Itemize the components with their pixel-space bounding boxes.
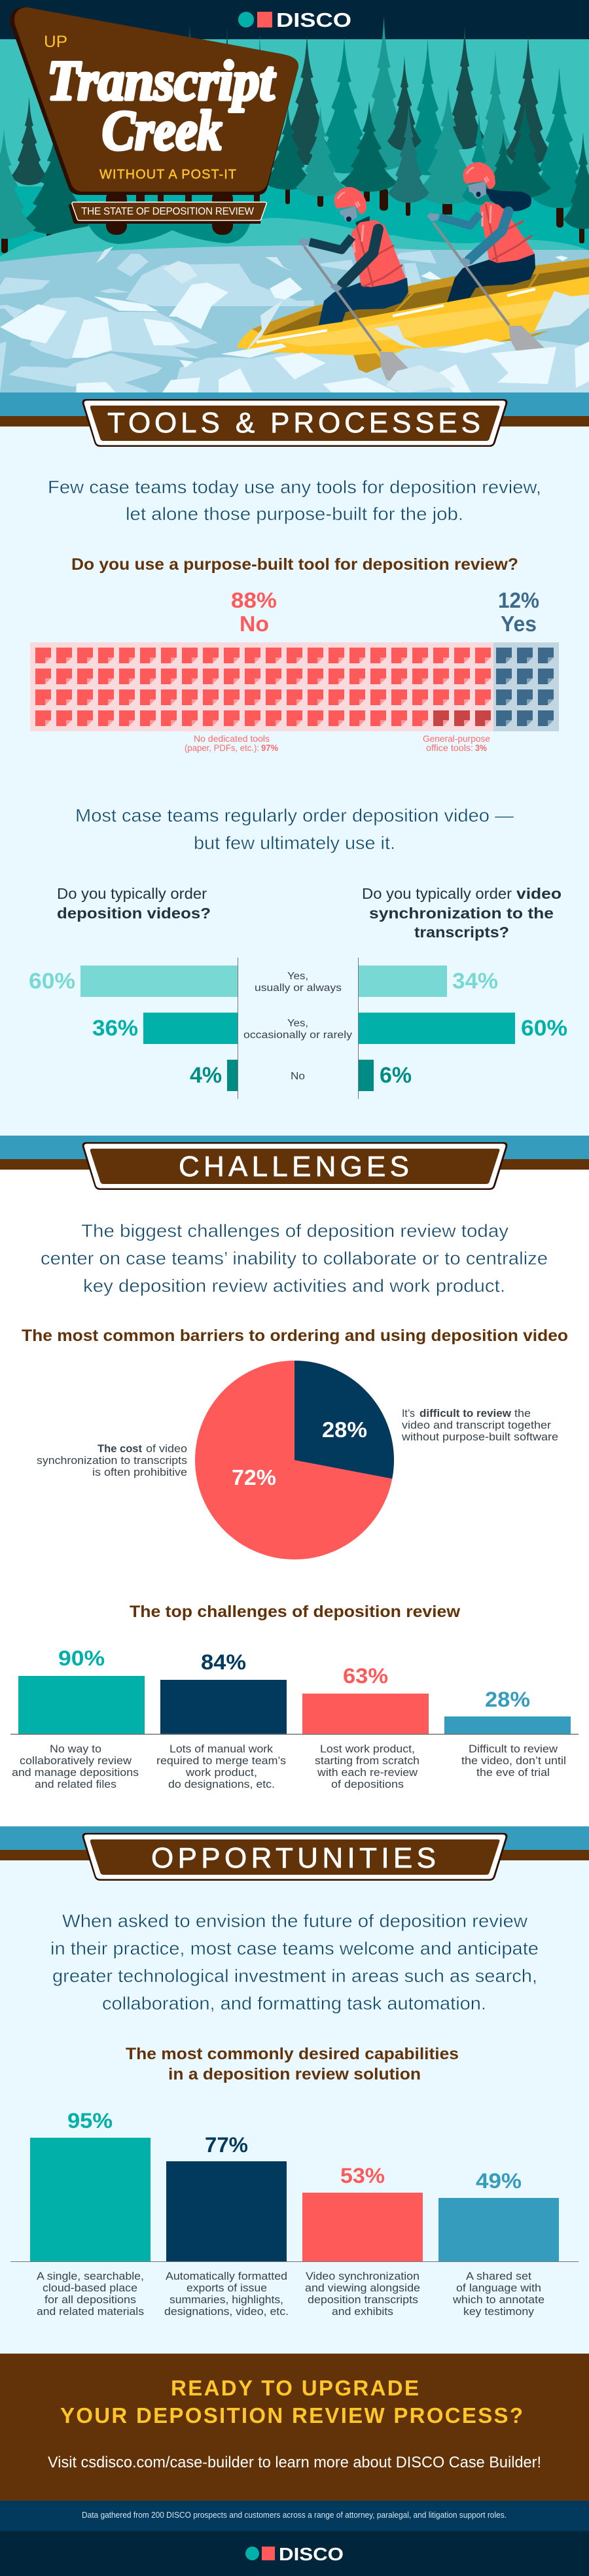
heading: barriers: The most common barriers to ordering and using deposition video — [22, 1327, 568, 1345]
caption: no dedicated tools: (paper, PDFs, etc.): — [185, 742, 259, 753]
right percentages: 34% — [452, 969, 498, 994]
title sign: Transcript — [47, 49, 276, 112]
section band: opportunities — [0, 1826, 589, 1860]
intro text: tools: let alone those purpose-built for the job. — [126, 504, 463, 524]
caption: video synchronization: and exhibits — [332, 2305, 393, 2318]
source note: Data gathered from 200 DISCO prospects and customers across a range of attorney, paralegal, and litigation support roles. — [82, 2511, 507, 2520]
left percentages: 4% — [190, 1063, 222, 1088]
intro text: video: Most case teams regularly order deposition video — — [75, 805, 514, 826]
title sign: WITHOUT A POST-IT — [99, 167, 236, 182]
row labels: occasionally or rarely — [243, 1030, 352, 1041]
logo: DISCO top: DISCO — [276, 9, 351, 31]
hero illustration — [0, 0, 589, 392]
caption: no way to collaborate — [12, 1743, 139, 1790]
row labels — [243, 971, 352, 1082]
caption: cost of video: The cost — [98, 1442, 142, 1455]
stat: 88% no — [231, 588, 277, 636]
left percentages: 60% — [29, 969, 75, 994]
front paddler — [298, 187, 408, 381]
footer with logo — [0, 2531, 589, 2576]
question: video synchronization: Do you typically order — [362, 885, 512, 902]
right bars — [359, 966, 515, 1091]
caption: no way to collaborate: and related files — [35, 1778, 116, 1790]
cta heading: READY TO UPGRADE — [171, 2376, 419, 2400]
bar chart: top challenges: 84% — [201, 1650, 246, 1674]
section heading: opportunities — [82, 1833, 507, 1881]
caption: formatted exports: summaries, highlights, — [170, 2293, 283, 2306]
pie chart: barriers: 28% — [322, 1418, 367, 1442]
caption: manual work: required to merge team’s — [156, 1754, 286, 1767]
left bars — [80, 966, 238, 1091]
caption: no way to collaborate: No way to — [50, 1743, 101, 1755]
bar chart: desired capabilities: 77% — [205, 2133, 248, 2157]
top navy band — [0, 0, 589, 39]
caption: difficult to review video: the eve of trial — [476, 1766, 550, 1779]
caption: manual work: do designations, etc. — [168, 1778, 275, 1790]
pie chart: barriers — [195, 1361, 394, 1559]
caption: video synchronization — [305, 2270, 420, 2318]
row labels: No — [291, 1071, 305, 1082]
caption: no way to collaborate: collaboratively review — [20, 1754, 132, 1767]
stat: 12% yes — [498, 588, 539, 636]
title sign: UP — [44, 33, 67, 51]
caption: cost of video: of video — [146, 1442, 187, 1455]
pie chart: barriers: 72% — [232, 1465, 276, 1489]
caption: general-purpose office tools — [423, 733, 490, 753]
heading: desired capabilities — [126, 2045, 459, 2083]
question: deposition videos: deposition videos? — [57, 905, 211, 922]
caption: video synchronization: Video synchronization — [306, 2270, 419, 2282]
source note — [0, 2501, 589, 2531]
caption: difficult to review — [401, 1407, 558, 1443]
caption: lost work product: with each re-review — [317, 1766, 418, 1779]
row labels: Yes, — [287, 971, 308, 982]
caption: difficult to review: the — [514, 1407, 531, 1419]
river bank waves — [0, 218, 589, 268]
bar chart: top challenges — [10, 1646, 579, 1790]
caption: formatted exports: designations, video, etc. — [164, 2305, 289, 2318]
river of paper — [0, 245, 589, 392]
bar chart: desired capabilities: 95% — [67, 2109, 113, 2132]
forest of trees — [0, 16, 589, 253]
intro text: tools — [48, 477, 541, 524]
section heading: opportunities: OPPORTUNITIES — [151, 1842, 436, 1874]
caption: shared language: A shared set — [466, 2270, 531, 2282]
bar chart: desired capabilities: 53% — [340, 2164, 385, 2187]
call to action panel — [0, 2354, 589, 2501]
caption: lost work product: of depositions — [331, 1778, 404, 1790]
cta link text: Visit csdisco.com/case-builder to learn more about DISCO Case Builder! — [48, 2454, 541, 2471]
caption: cost of video — [37, 1442, 187, 1478]
intro text: challenges: center on case teams’ inability to collaborate or to centralize — [41, 1248, 548, 1268]
section heading: tools and processes: TOOLS & PROCESSES — [107, 407, 480, 439]
sign posts — [106, 190, 260, 235]
heading: desired capabilities: The most commonly desired capabilities — [126, 2045, 459, 2063]
section band: challenges — [0, 1136, 589, 1826]
section heading: tools and processes — [82, 399, 507, 447]
caption: no dedicated tools: No dedicated tools — [194, 733, 270, 744]
caption: cost of video: is often prohibitive — [92, 1466, 187, 1478]
caption: shared language: of language with — [456, 2282, 541, 2294]
caption: difficult to review: difficult to review — [419, 1407, 512, 1419]
pictogram chart: sticky notes — [30, 642, 559, 731]
caption: lost work product: starting from scratch — [315, 1754, 419, 1767]
heading: purpose-built tool question: Do you use a purpose-built tool for deposition review? — [71, 555, 518, 574]
intro text: video — [75, 805, 514, 853]
caption: shared language: key testimony — [463, 2305, 535, 2318]
caption: difficult to review: It’s — [402, 1407, 415, 1419]
caption: difficult to review: without purpose-built software — [401, 1431, 558, 1443]
right percentages: 60% — [521, 1016, 567, 1041]
heading: desired capabilities: in a deposition review solution — [168, 2065, 421, 2083]
intro text: tools: Few case teams today use any tools for deposition review, — [48, 477, 541, 497]
caption: no way to collaborate: and manage depositions — [12, 1766, 139, 1779]
caption: general-purpose office tools: office tools: — [426, 742, 473, 753]
caption: formatted exports: exports of issue — [187, 2282, 267, 2294]
subtitle banner — [69, 202, 266, 224]
question: video synchronization — [362, 885, 562, 941]
caption: single place: and related materials — [37, 2305, 144, 2318]
stat: 12% yes: 12% — [498, 588, 539, 612]
heading: top challenges: The top challenges of deposition review — [130, 1603, 461, 1621]
bar chart: top challenges: 90% — [58, 1646, 105, 1670]
intro text: video: but few ultimately use it. — [194, 833, 395, 853]
section heading: challenges: CHALLENGES — [179, 1151, 409, 1183]
caption: single place: cloud-based place — [43, 2282, 137, 2294]
diverging bar chart: video ordering — [29, 958, 567, 1099]
raft — [237, 258, 589, 373]
subtitle banner: THE STATE OF DEPOSITION REVIEW — [81, 206, 255, 217]
caption: formatted exports — [164, 2270, 289, 2318]
caption: single place: A single, searchable, — [37, 2270, 144, 2282]
caption: single place: for all depositions — [45, 2293, 136, 2306]
bar chart: desired capabilities — [10, 2109, 579, 2318]
caption: manual work — [156, 1743, 286, 1790]
cta heading — [60, 2376, 523, 2428]
intro text: challenges — [41, 1221, 548, 1296]
section band: tools — [0, 392, 589, 426]
bar chart: top challenges: 63% — [343, 1664, 388, 1688]
question: deposition videos: Do you typically order — [57, 885, 207, 902]
intro text: opportunities: When asked to envision the future of deposition review — [62, 1911, 528, 1931]
intro text: opportunities: greater technological investment in areas such as search, — [52, 1966, 537, 1986]
caption: shared language — [452, 2270, 544, 2318]
caption: single place — [37, 2270, 144, 2318]
caption: difficult to review video: Difficult to review — [469, 1743, 558, 1755]
caption: difficult to review video — [461, 1743, 566, 1779]
stat: 88% no: 88% — [231, 588, 277, 612]
rear paddler — [427, 162, 546, 368]
caption: difficult to review: video and transcript together — [402, 1419, 551, 1431]
question: video synchronization: video — [516, 885, 562, 902]
caption: video synchronization: deposition transcripts — [308, 2293, 418, 2306]
foreground papers — [77, 291, 589, 392]
cta heading: YOUR DEPOSITION REVIEW PROCESS? — [60, 2403, 523, 2428]
caption: video synchronization: and viewing alongside — [305, 2282, 420, 2294]
question: video synchronization: transcripts? — [414, 924, 509, 941]
bar chart: desired capabilities: 49% — [476, 2169, 522, 2193]
logo: DISCO top — [238, 9, 351, 31]
caption: no dedicated tools — [185, 733, 279, 753]
section heading: challenges — [82, 1142, 507, 1190]
stat: 88% no: No — [240, 612, 269, 636]
bar chart: top challenges: 28% — [485, 1688, 530, 1711]
caption: manual work: work product, — [185, 1766, 257, 1779]
intro text: opportunities: in their practice, most case teams welcome and anticipate — [50, 1938, 539, 1958]
question: video synchronization: synchronization to the — [369, 905, 554, 922]
intro text: opportunities: collaboration, and formatting task automation. — [102, 1993, 486, 2013]
caption: formatted exports: Automatically formatted — [166, 2270, 287, 2282]
caption: difficult to review video: the video, don’t until — [461, 1754, 566, 1767]
caption: manual work: Lots of manual work — [170, 1743, 274, 1755]
intro text: challenges: The biggest challenges of deposition review today — [81, 1221, 509, 1241]
caption: lost work product: Lost work product, — [320, 1743, 415, 1755]
caption: lost work product — [315, 1743, 419, 1790]
question: deposition videos — [57, 885, 211, 922]
row labels: Yes, — [287, 1018, 308, 1029]
right percentages — [380, 969, 567, 1088]
title sign: Creek — [102, 99, 222, 162]
row labels: usually or always — [255, 983, 342, 994]
stat: 12% yes: Yes — [501, 612, 537, 636]
footer with logo: DISCO — [279, 2544, 344, 2564]
intro text: opportunities — [50, 1911, 539, 2013]
caption: general-purpose office tools: General-purpose — [423, 733, 490, 744]
caption: shared language: which to annotate — [452, 2293, 544, 2306]
caption: cost of video: synchronization to transcripts — [37, 1454, 187, 1467]
caption: no dedicated tools: 97% — [261, 742, 279, 753]
caption: general-purpose office tools: 3% — [475, 742, 487, 753]
left percentages: 36% — [92, 1016, 138, 1041]
left percentages — [29, 969, 222, 1088]
right percentages: 6% — [380, 1063, 412, 1088]
title sign — [10, 7, 298, 235]
intro text: challenges: key deposition review activities and work product. — [83, 1276, 505, 1296]
